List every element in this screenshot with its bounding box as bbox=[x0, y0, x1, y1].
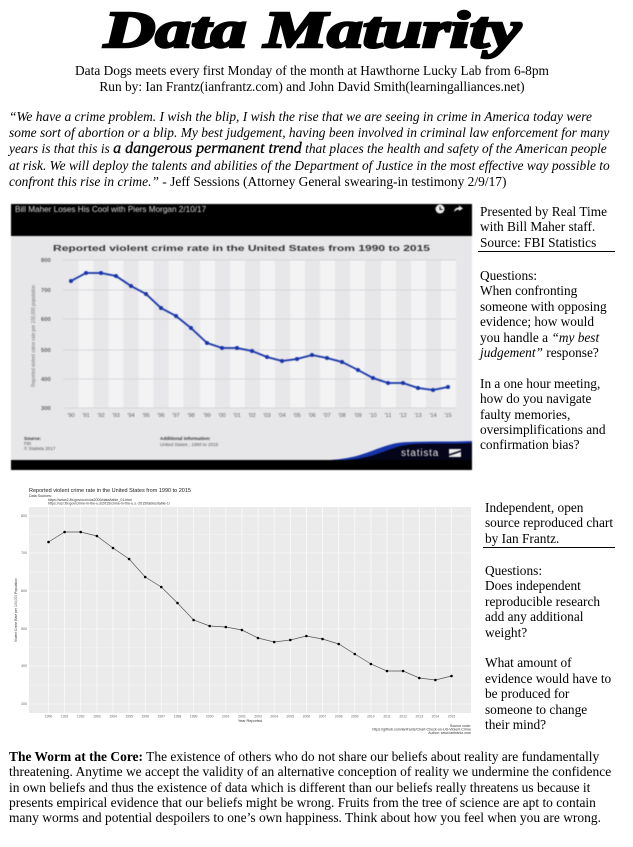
x axis labels: '14 bbox=[429, 413, 438, 419]
source code credit: https://github.com/ianfrantz/Chart-Check-on-US-Violent-Crime bbox=[372, 728, 471, 732]
source note: Source: bbox=[24, 436, 42, 441]
data sources: Data Sources: bbox=[29, 494, 52, 498]
video frame background bbox=[11, 204, 472, 470]
line series bbox=[47, 531, 453, 681]
x axis labels: '94 bbox=[127, 413, 136, 419]
statista logo banner: statista bbox=[401, 448, 439, 459]
y axis labels: 800 bbox=[41, 258, 51, 264]
data sources bbox=[29, 494, 170, 506]
closing paragraph: The Worm at the Core: in own beliefs and thus the existence of data which is different than our beliefs really threatens us because it bbox=[9, 780, 590, 795]
x axis labels: 1999 bbox=[190, 714, 197, 718]
x axis labels: '10 bbox=[369, 413, 377, 419]
x axis labels: 1997 bbox=[158, 714, 165, 718]
additional information note: Additional information: bbox=[160, 436, 211, 441]
additional information note bbox=[160, 436, 219, 447]
x axis labels bbox=[45, 714, 455, 718]
x axis labels: 2002 bbox=[238, 714, 246, 718]
x axis labels: 2010 bbox=[367, 714, 375, 718]
y axis labels: 600 bbox=[21, 589, 27, 593]
chart image: Bill Maher video still with Statista chart bbox=[10, 203, 473, 471]
x axis labels: 1991 bbox=[61, 714, 68, 718]
y axis labels: 400 bbox=[41, 377, 51, 383]
x axis labels: '00 bbox=[218, 413, 226, 419]
x axis labels: 2005 bbox=[287, 714, 294, 718]
x axis labels: 2013 bbox=[416, 714, 423, 718]
questions: second chart: reproducible research bbox=[485, 594, 600, 609]
quote from Jeff Sessions: at risk. We will deploy the talents and abilities of the Department of Justice in the most effective way possible to bbox=[9, 158, 610, 173]
questions: first chart: how do you navigate bbox=[480, 391, 591, 406]
x axis labels: 2009 bbox=[351, 714, 359, 718]
x axis labels: 2012 bbox=[399, 714, 407, 718]
x axis labels: 2015 bbox=[448, 714, 455, 718]
x axis labels: '15 bbox=[444, 413, 452, 419]
caption: first chart source: Presented by Real Time bbox=[480, 204, 607, 219]
questions: second chart: be produced for bbox=[485, 686, 569, 701]
title: Data Maturity bbox=[103, 2, 522, 59]
questions: second chart bbox=[485, 563, 611, 732]
x axis labels: 2003 bbox=[254, 714, 262, 718]
questions: second chart: evidence would have to bbox=[485, 671, 611, 686]
y axis labels: 500 bbox=[21, 627, 27, 631]
questions: first chart: someone with opposing bbox=[480, 299, 607, 314]
quote from Jeff Sessions: years is that this is a dangerous permanent trend that places the health and safety of the American people bbox=[9, 140, 607, 157]
video title: Bill Maher Loses His Cool with Piers Morgan 2/10/17 bbox=[15, 205, 207, 214]
source note: © Statista 2017 bbox=[24, 445, 56, 451]
x axis labels: '08 bbox=[338, 413, 346, 419]
closing paragraph: The Worm at the Core bbox=[9, 749, 611, 825]
questions: second chart: Does independent bbox=[485, 578, 581, 593]
y axis labels bbox=[41, 258, 51, 412]
source code credit bbox=[372, 724, 471, 735]
y axis labels: 800 bbox=[21, 514, 27, 518]
caption: second chart author bbox=[485, 500, 613, 546]
x axis labels: '95 bbox=[142, 413, 150, 419]
x axis labels: 2007 bbox=[319, 714, 326, 718]
x axis labels: 1993 bbox=[93, 714, 101, 718]
quote from Jeff Sessions bbox=[8, 109, 610, 189]
source note bbox=[24, 436, 56, 451]
x axis labels: '05 bbox=[293, 413, 301, 419]
x axis labels: '02 bbox=[248, 413, 256, 419]
quote from Jeff Sessions: confront this rise in crime.” - Jeff Sessions (Attorney General swearing-in testimony 2/9/17) bbox=[9, 174, 507, 189]
meeting information: Data Dogs meets every first Monday of the month at Hawthorne Lucky Lab from 6-8pm bbox=[75, 63, 549, 78]
x axis labels: '99 bbox=[203, 413, 211, 419]
x axis labels: 2014 bbox=[432, 714, 439, 718]
source note: FBI bbox=[24, 441, 31, 446]
x axis labels: '11 bbox=[384, 413, 392, 419]
questions: first chart: judgement” response? bbox=[480, 345, 599, 360]
y axis labels: 400 bbox=[21, 664, 27, 668]
x axis labels: '98 bbox=[187, 413, 195, 419]
chart title: Reported violent crime rate in the United States from 1990 to 2015 bbox=[53, 243, 430, 253]
questions: first chart: you handle a “my best bbox=[480, 330, 599, 345]
quote from Jeff Sessions: “We have a crime problem. I wish the blip, I wish the rise that we are seeing in crime in America today were bbox=[9, 109, 592, 124]
y axis labels: 500 bbox=[41, 348, 51, 354]
x axis labels: '01 bbox=[233, 413, 241, 419]
x axis labels: '97 bbox=[172, 413, 180, 419]
x axis labels: 1998 bbox=[174, 714, 181, 718]
chart panel bbox=[11, 236, 472, 460]
y axis labels: 300 bbox=[21, 702, 27, 706]
quote from Jeff Sessions: some sort of abortion or a blip. My best judgement, having been involved in criminal law enforcement for many bbox=[9, 125, 609, 140]
closing paragraph: The Worm at the Core: presents empirical evidence that our beliefs might be wrong. Fruits from the tree of science are apt to contain bbox=[9, 795, 596, 810]
additional information note: United States ; 1990 to 2015 bbox=[160, 442, 219, 447]
x axis labels: 1992 bbox=[77, 714, 85, 718]
x axis labels: 1990 bbox=[45, 714, 52, 718]
icon: clock bbox=[436, 204, 444, 214]
questions: second chart: add any additional bbox=[485, 609, 583, 624]
meeting information: Run by: Ian Frantz(ianfrantz.com) and John David Smith(learningalliances.net) bbox=[99, 79, 525, 94]
caption: second chart author: source reproduced chart bbox=[485, 515, 613, 530]
caption: second chart author: Independent, open bbox=[485, 500, 583, 515]
x axis labels: '07 bbox=[323, 413, 331, 419]
x axis labels: '04 bbox=[278, 413, 287, 419]
questions: first chart: Questions: bbox=[480, 268, 537, 283]
x axis labels: '92 bbox=[97, 413, 105, 419]
x axis title: Year Reported bbox=[238, 719, 262, 723]
questions: second chart: What amount of bbox=[485, 655, 572, 670]
x axis labels: 2008 bbox=[335, 714, 343, 718]
questions: first chart bbox=[478, 268, 607, 452]
x axis labels: 2001 bbox=[222, 714, 230, 718]
x axis labels bbox=[67, 413, 452, 419]
x axis labels: 1996 bbox=[141, 714, 149, 718]
chart: reproduced crime rate line chart bbox=[14, 488, 471, 735]
x axis labels: '13 bbox=[414, 413, 422, 419]
x axis labels: 1995 bbox=[125, 714, 133, 718]
y axis title: Violent Crime Rate per 100,000 Population bbox=[14, 578, 18, 642]
x axis labels: '03 bbox=[263, 413, 271, 419]
questions: first chart: In a one hour meeting, bbox=[480, 376, 600, 391]
questions: second chart: their mind? bbox=[485, 717, 546, 732]
data sources: https://ucr.fbi.gov/crime-in-the-u.s/2015/crime-in-the-u.s.-2015/tables/table-1/ bbox=[48, 502, 170, 506]
caption: first chart source: Source: FBI Statistics bbox=[480, 235, 596, 250]
caption: second chart author: by Ian Frantz. bbox=[485, 531, 559, 546]
x axis labels: '12 bbox=[399, 413, 407, 419]
x axis labels: '91 bbox=[82, 413, 90, 419]
x axis labels: '96 bbox=[157, 413, 165, 419]
questions: second chart: someone to change bbox=[485, 702, 587, 717]
meeting information bbox=[75, 63, 549, 94]
questions: first chart: faulty memories, bbox=[480, 407, 570, 422]
questions: second chart: Questions: bbox=[485, 563, 542, 578]
y axis labels bbox=[21, 514, 27, 706]
questions: first chart: oversimplifications and bbox=[480, 422, 605, 437]
x axis labels: '09 bbox=[354, 413, 362, 419]
y axis labels: 700 bbox=[41, 288, 51, 294]
y axis title: Reported violent crime rate per 100,000 population bbox=[31, 285, 37, 387]
statista logo banner bbox=[330, 441, 472, 460]
questions: second chart: weight? bbox=[485, 625, 527, 640]
questions: first chart: evidence; how would bbox=[480, 314, 594, 329]
plot panel bbox=[29, 507, 471, 713]
caption: first chart source bbox=[480, 204, 607, 250]
icon: share arrow bbox=[454, 206, 463, 212]
caption: first chart source: with Bill Maher staff. bbox=[480, 219, 595, 234]
y axis labels: 300 bbox=[41, 406, 51, 412]
questions: first chart: confirmation bias? bbox=[480, 437, 580, 452]
x axis labels: '06 bbox=[308, 413, 316, 419]
y axis labels: 600 bbox=[41, 317, 51, 323]
y axis labels: 700 bbox=[21, 551, 27, 555]
line series bbox=[69, 271, 450, 392]
questions: first chart: When confronting bbox=[480, 283, 577, 298]
closing paragraph: The Worm at the Core: many worms and potential despoilers to one’s own happiness. Think about how you feel when you are wrong. bbox=[9, 810, 601, 825]
x axis labels: 2011 bbox=[383, 714, 391, 718]
x axis labels: 2000 bbox=[206, 714, 214, 718]
x axis labels: 2006 bbox=[303, 714, 310, 718]
source code credit: Author: www.ianfrantz.com bbox=[428, 731, 471, 735]
closing paragraph: The Worm at the Core: threatening. Anytime we accept the validity of an alternative conception of reality we undermine the confidence bbox=[9, 764, 611, 779]
x axis labels: '93 bbox=[112, 413, 120, 419]
x axis labels: 2004 bbox=[270, 714, 278, 718]
source code credit: Source code: bbox=[450, 724, 471, 728]
x axis labels: '90 bbox=[67, 413, 75, 419]
x axis labels: 1994 bbox=[109, 714, 117, 718]
chart title: Reported violent crime rate in the United States from 1990 to 2015 bbox=[29, 488, 191, 494]
closing paragraph: The Worm at the Core: The Worm at the Core: The existence of others who do not share our beliefs about reality are fundamentally bbox=[9, 749, 599, 764]
data sources: https://www2.fbi.gov/ucr/cius2009/data/table_01.html bbox=[48, 498, 132, 502]
